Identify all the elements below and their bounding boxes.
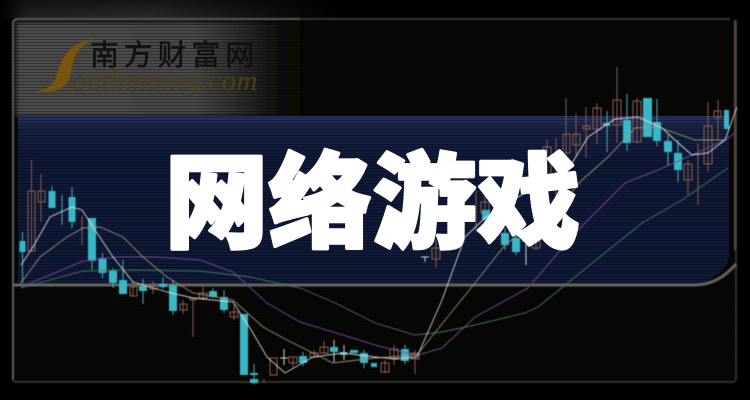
title: 网络游戏	[165, 146, 581, 261]
logo swoosh S	[36, 39, 94, 92]
purple moving average line	[21, 133, 735, 355]
logo domain wordmark: outhmoney.com	[72, 65, 258, 97]
red hollow candle bodies	[28, 100, 721, 375]
top strip fade	[0, 0, 340, 18]
green moving average line	[21, 168, 728, 335]
top left glow strip	[0, 0, 340, 18]
white moving average line	[21, 107, 737, 373]
blue band panel	[18, 116, 729, 285]
logo Chinese wordmark: 南方财富网	[90, 39, 259, 72]
cyan candle wicks	[22, 94, 678, 384]
cyan candle bodies	[20, 98, 729, 383]
red candle wicks	[32, 67, 718, 383]
tan moving average line	[21, 127, 725, 363]
candlestick chart	[20, 67, 737, 384]
logo backdrop glow	[16, 22, 300, 116]
white cross candles	[280, 240, 530, 365]
logo: Southmoney	[36, 39, 259, 97]
